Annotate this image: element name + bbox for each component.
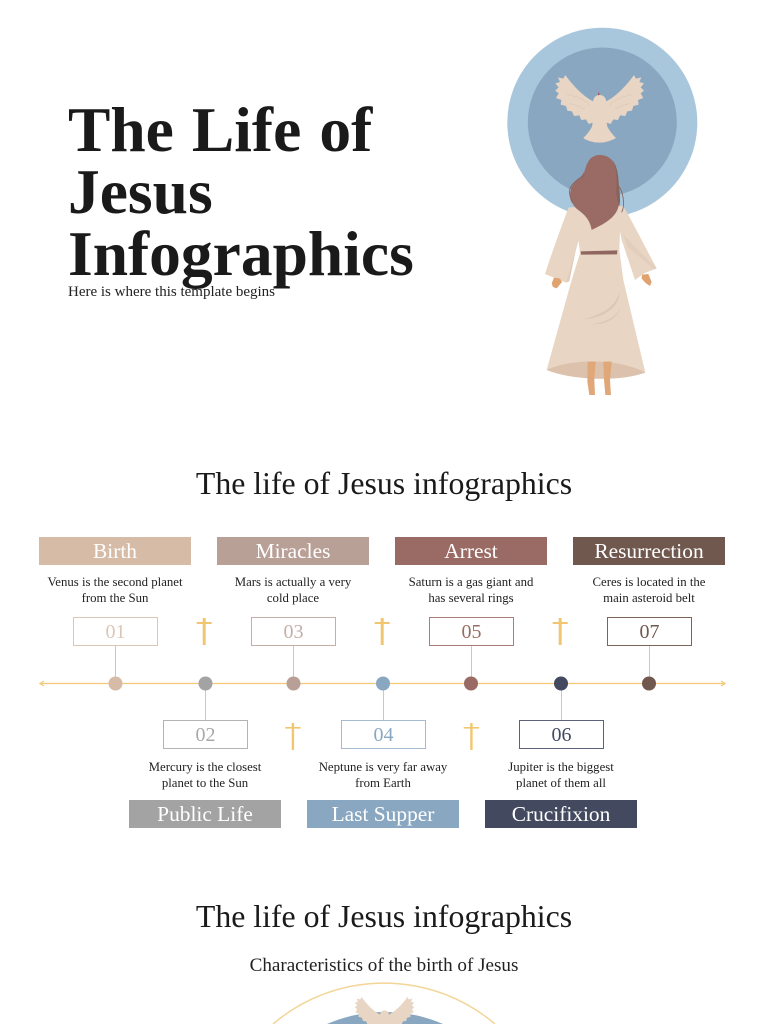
subheading: Characteristics of the birth of Jesus xyxy=(250,955,518,976)
text: Miracles description: Mars is actually a very xyxy=(235,575,351,589)
bar: Miracles xyxy=(217,537,369,565)
number: 05 xyxy=(429,617,514,646)
left sleeve xyxy=(545,207,579,283)
bar: Crucifixion: Crucifixion xyxy=(512,802,610,826)
gold ring xyxy=(273,983,495,1024)
sleeve shading xyxy=(566,246,577,283)
text: Public Life description xyxy=(149,760,262,790)
number: 01 xyxy=(73,617,158,646)
bar: Birth: Birth xyxy=(93,539,137,563)
bar: Arrest: Arrest xyxy=(444,539,498,563)
number: 02 xyxy=(163,720,248,749)
number: 07 xyxy=(607,617,692,646)
title xyxy=(68,94,414,289)
text: Public Life description: planet to the Sun xyxy=(162,776,248,790)
text: Miracles description: cold place xyxy=(267,590,319,604)
text: Crucifixion description: planet of them all xyxy=(516,776,606,790)
left hand xyxy=(552,278,562,288)
text: Resurrection description: main asteroid belt xyxy=(603,590,695,604)
title: Infographics xyxy=(68,218,414,289)
text: Last Supper description: from Earth xyxy=(355,776,411,790)
timeline dots xyxy=(108,676,656,690)
dress body xyxy=(547,206,645,379)
timeline axis xyxy=(40,681,725,686)
connectors xyxy=(116,645,650,721)
illustration: figure beneath dove and halo xyxy=(507,28,698,395)
right sleeve xyxy=(618,206,657,280)
text: Crucifixion description xyxy=(508,760,614,790)
bar: Last Supper xyxy=(307,800,459,828)
hair strands xyxy=(569,175,624,212)
hem shading xyxy=(547,362,645,379)
number: 06: 06 xyxy=(552,724,572,746)
icon: figure xyxy=(545,155,657,395)
bar: Public Life xyxy=(129,800,281,828)
heading: section two: The life of Jesus infographics xyxy=(196,899,572,934)
blue disc xyxy=(327,1012,443,1024)
text: Birth description: from the Sun xyxy=(82,590,148,604)
text: Resurrection description xyxy=(592,575,706,604)
illustration: cropped halo and dove xyxy=(272,982,496,1024)
text: Miracles description xyxy=(235,575,352,604)
bar: Crucifixion xyxy=(485,800,637,828)
text: Birth description: Venus is the second planet xyxy=(47,575,183,589)
icon: dove xyxy=(555,75,644,143)
dress folds xyxy=(583,293,619,319)
text: Public Life description: Mercury is the closest xyxy=(149,760,261,774)
text: Last Supper description: Neptune is very far away xyxy=(319,760,447,774)
number: 06 xyxy=(519,720,604,749)
icons: crosses xyxy=(197,618,568,750)
text: Resurrection description: Ceres is located in the xyxy=(592,575,706,589)
icon: dove xyxy=(355,997,414,1024)
number: 01: 01 xyxy=(106,621,126,643)
number: 03: 03 xyxy=(284,621,304,643)
text: Arrest description: has several rings xyxy=(428,590,514,604)
hair shadow xyxy=(613,160,620,206)
icon: halo circles xyxy=(507,28,697,218)
timeline xyxy=(38,618,726,750)
text: Arrest description: Saturn is a gas giant and xyxy=(409,575,533,589)
bar: Arrest xyxy=(395,537,547,565)
bar: Resurrection xyxy=(573,537,725,565)
text: Arrest description xyxy=(409,575,534,604)
bar: Miracles: Miracles xyxy=(256,539,330,563)
right hand xyxy=(642,274,652,286)
number: 05: 05 xyxy=(462,621,482,643)
belt xyxy=(581,250,617,255)
bar: Public Life: Public Life xyxy=(157,802,253,826)
bar: Last Supper: Last Supper xyxy=(332,802,434,826)
title: Jesus xyxy=(68,156,213,227)
subtitle: Here is where this template begins xyxy=(68,284,275,300)
number: 07: 07 xyxy=(640,621,660,643)
title: The Life of xyxy=(68,94,372,165)
text: Crucifixion description: Jupiter is the biggest xyxy=(508,760,614,774)
number: 02: 02 xyxy=(196,724,216,746)
number: 04 xyxy=(341,720,426,749)
text: Birth description xyxy=(47,575,183,604)
number: 04: 04 xyxy=(374,724,394,746)
hair xyxy=(570,155,620,230)
legs xyxy=(587,362,596,395)
bar: Birth xyxy=(39,537,191,565)
bar: Resurrection: Resurrection xyxy=(594,539,704,563)
text: Last Supper description xyxy=(319,760,448,790)
number: 03 xyxy=(251,617,336,646)
heading: section one: The life of Jesus infographics xyxy=(196,466,572,501)
